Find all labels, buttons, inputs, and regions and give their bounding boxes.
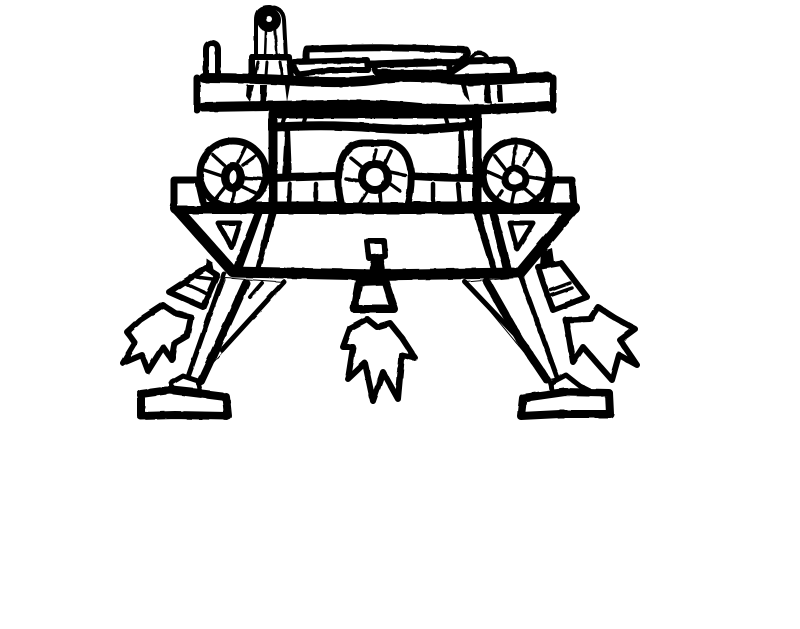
right foot bbox=[521, 375, 610, 416]
central body bbox=[272, 112, 477, 206]
left flame bbox=[123, 305, 191, 371]
right thruster bbox=[538, 248, 587, 310]
periscope bbox=[256, 7, 286, 58]
right wheel bbox=[483, 141, 549, 207]
left hull triangle bbox=[218, 223, 240, 248]
centre nozzle bbox=[354, 241, 394, 309]
right hull triangle bbox=[510, 223, 533, 249]
deck plates bbox=[294, 48, 513, 78]
left thruster bbox=[169, 258, 217, 307]
left leg bbox=[188, 274, 284, 381]
main upper bar bbox=[197, 77, 553, 110]
periscope base box bbox=[252, 57, 291, 78]
left side box bbox=[174, 180, 204, 206]
left foot bbox=[141, 376, 228, 416]
centre wheel bbox=[338, 143, 411, 206]
right leg bbox=[465, 277, 557, 380]
right flame bbox=[566, 307, 637, 380]
left wheel bbox=[200, 141, 266, 207]
right side box bbox=[546, 180, 574, 206]
left rear pipe bbox=[206, 43, 218, 76]
centre flame bbox=[343, 319, 415, 401]
lower hull bbox=[176, 208, 574, 275]
